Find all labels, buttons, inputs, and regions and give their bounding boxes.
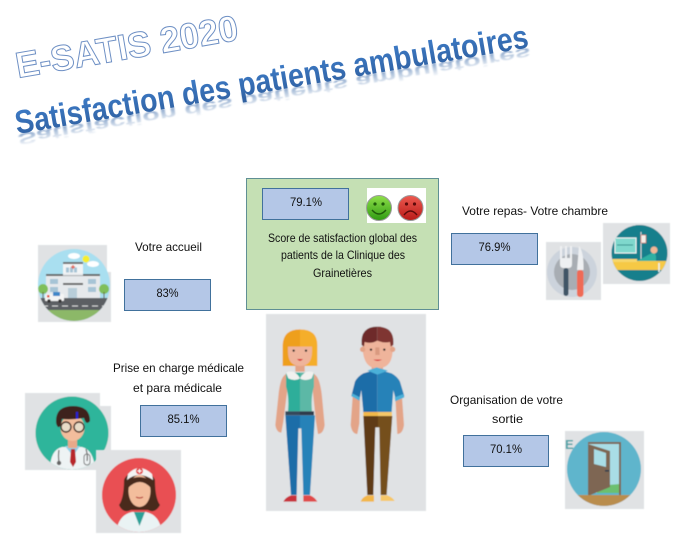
icon: hospital building (38, 245, 111, 322)
icon: plate and cutlery (546, 242, 601, 300)
heading: Organisation de votre sortie: sortie (492, 412, 523, 426)
heading: Prise en charge médicale et para médicale (113, 361, 244, 395)
icon: nurse (96, 450, 181, 533)
text: global score description: patients de la Clinique des (281, 248, 405, 262)
subtitle: Satisfaction des patients ambulatoires: Satisfaction des patients ambulatoires (16, 44, 532, 149)
figure: woman (275, 329, 325, 502)
title: E-SATIS 2020: E-SATIS 2020 (12, 7, 241, 86)
text: global score description: Grainetières (313, 266, 372, 280)
icon: doctor (25, 393, 111, 470)
heading: Organisation de votre sortie (450, 393, 563, 426)
fragment: teal letter E: E (565, 437, 574, 452)
heading: Prise en charge médicale et para médicale: Prise en charge médicale (113, 361, 244, 375)
text: global score description (268, 231, 417, 280)
heading: Prise en charge médicale et para médicale: et para médicale (133, 381, 222, 395)
value box: 76.9% (452, 234, 538, 264)
value box: 70.1% (464, 436, 548, 466)
panel: illustration of two patients (266, 314, 426, 511)
text: global score description: Score de satisfaction global des (268, 231, 417, 245)
subtitle: Satisfaction des patients ambulatoires: Satisfaction des patients ambulatoires (12, 18, 531, 141)
value box: 83%: 83% (156, 286, 179, 300)
value box: 76.9%: 76.9% (478, 240, 511, 254)
value box: 79.1%: 79.1% (290, 195, 322, 209)
heading: Organisation de votre sortie: Organisation de votre (450, 393, 563, 407)
value box: 70.1%: 70.1% (490, 442, 522, 456)
icon: hospital bed (603, 223, 670, 284)
heading: Votre accueil: Votre accueil (135, 240, 202, 254)
icon: green and red smileys (366, 188, 426, 223)
value box: 85.1% (140, 406, 226, 436)
value box: 79.1% (262, 188, 348, 220)
figure: man (351, 327, 404, 502)
icon: open door (565, 431, 644, 510)
panel: global satisfaction score (246, 178, 438, 310)
value box: 85.1%: 85.1% (168, 412, 200, 426)
value box: 83% (124, 280, 210, 310)
heading: Votre repas - Votre chambre: Votre repas- Votre chambre (462, 204, 608, 218)
